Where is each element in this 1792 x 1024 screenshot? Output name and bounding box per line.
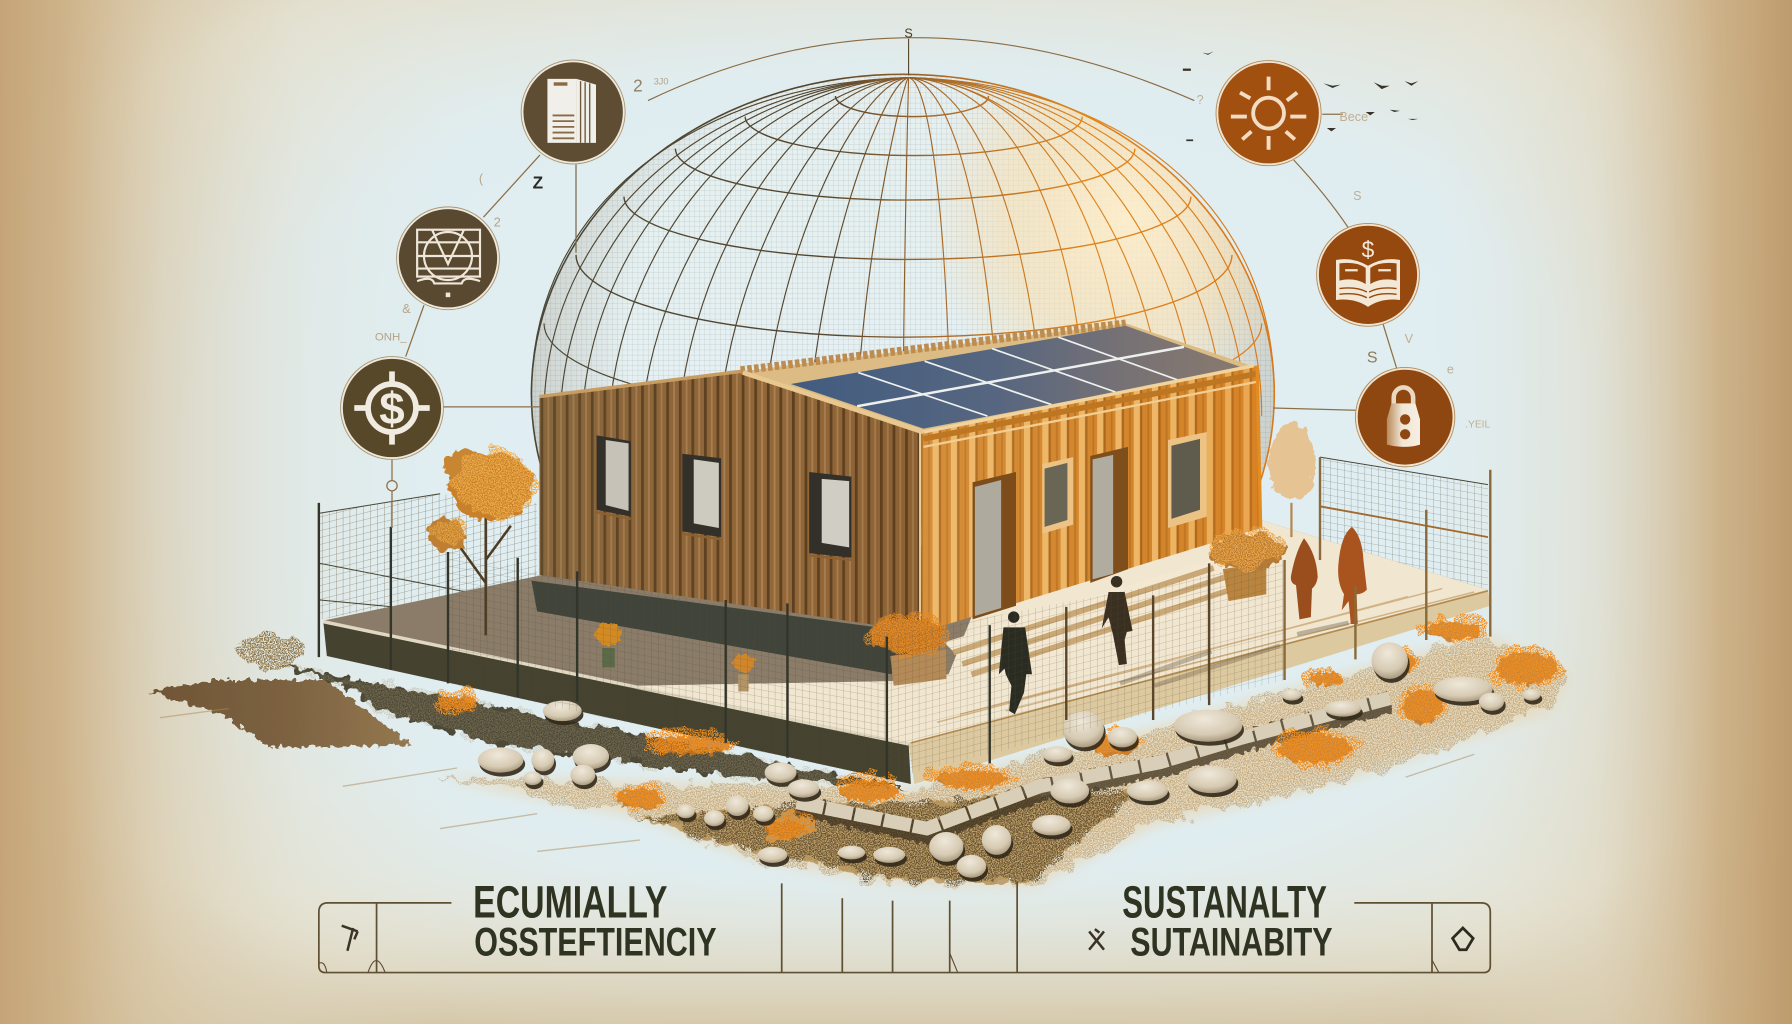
text: left heading: OSSTEFTIENCIY (474, 920, 717, 964)
small annotations left: 2 (633, 75, 643, 95)
tree right (1269, 423, 1317, 537)
small annotations right: S (1353, 189, 1362, 203)
birds (1183, 51, 1418, 141)
dry grass (242, 615, 1563, 840)
person on steps (1102, 576, 1133, 665)
small annotations left: 2 (494, 215, 501, 229)
retaining stones (797, 698, 1390, 833)
text: left heading (473, 877, 717, 964)
text: right heading (1122, 877, 1333, 964)
icon: dollar target (341, 357, 443, 459)
window right (1168, 432, 1207, 528)
icon: padlock (1355, 367, 1455, 467)
icon: house plan grid (397, 207, 499, 310)
top arc with S marker: S (904, 27, 913, 41)
icon: book with dollar: $ (1362, 237, 1375, 263)
window 1 (595, 435, 631, 519)
icon: dollar target: $ (379, 383, 405, 434)
window 3 (809, 472, 851, 560)
person walking (1338, 527, 1367, 624)
icon: diamond (1453, 928, 1473, 950)
door 2 (1090, 447, 1128, 583)
front fence (319, 457, 1490, 779)
small annotations right: V (1405, 332, 1414, 346)
small annotations left: ( (479, 172, 484, 186)
icon: book with dollar (1317, 223, 1419, 326)
window middle (1042, 457, 1073, 534)
icon: sun (1216, 61, 1321, 166)
planter centre (869, 615, 947, 686)
small annotations left: ONH_ (375, 332, 407, 344)
text: right heading: SUTAINABITY (1130, 920, 1333, 964)
planter right (1210, 528, 1286, 601)
small annotations right: ? (1197, 93, 1204, 107)
rocks (478, 642, 1542, 882)
person in robe (1291, 538, 1318, 619)
icon: crossed tools (1089, 929, 1104, 950)
house (531, 323, 1261, 674)
shadow under walkers (1120, 623, 1349, 686)
small annotations left: & (402, 302, 411, 316)
small annotations right: Bece (1339, 110, 1368, 124)
icon: building (521, 60, 625, 164)
people (999, 527, 1367, 714)
door 1 (973, 472, 1016, 619)
top arc with S marker (648, 27, 1194, 101)
back fences (320, 457, 1488, 619)
connector lines (387, 114, 1397, 528)
small annotations left: Z (533, 173, 543, 193)
text: right heading: SUSTANALTY (1122, 877, 1327, 928)
small plants (595, 623, 754, 691)
foundation (531, 581, 922, 674)
tree left (429, 448, 537, 635)
small annotations left (375, 75, 668, 344)
text: left heading: ECUMIALLY (473, 877, 667, 928)
window 2 (682, 454, 721, 539)
ground terrain (274, 634, 1568, 886)
icon: hammer (342, 926, 358, 951)
person front (999, 611, 1032, 714)
ground shadow (150, 680, 411, 747)
roof (741, 323, 1254, 432)
left wall (539, 371, 922, 632)
small annotations right: .YEIL (1465, 419, 1491, 430)
small annotations right: e (1447, 363, 1454, 377)
dome (530, 74, 1276, 482)
bottom frame (319, 882, 1490, 973)
small annotations left: 3J0 (654, 77, 668, 87)
steps (944, 560, 1255, 681)
small annotations right (1197, 93, 1491, 430)
small annotations right: S (1367, 349, 1378, 366)
ground streaks (160, 709, 1474, 851)
deck platform (323, 520, 1490, 784)
right wall (920, 366, 1261, 632)
